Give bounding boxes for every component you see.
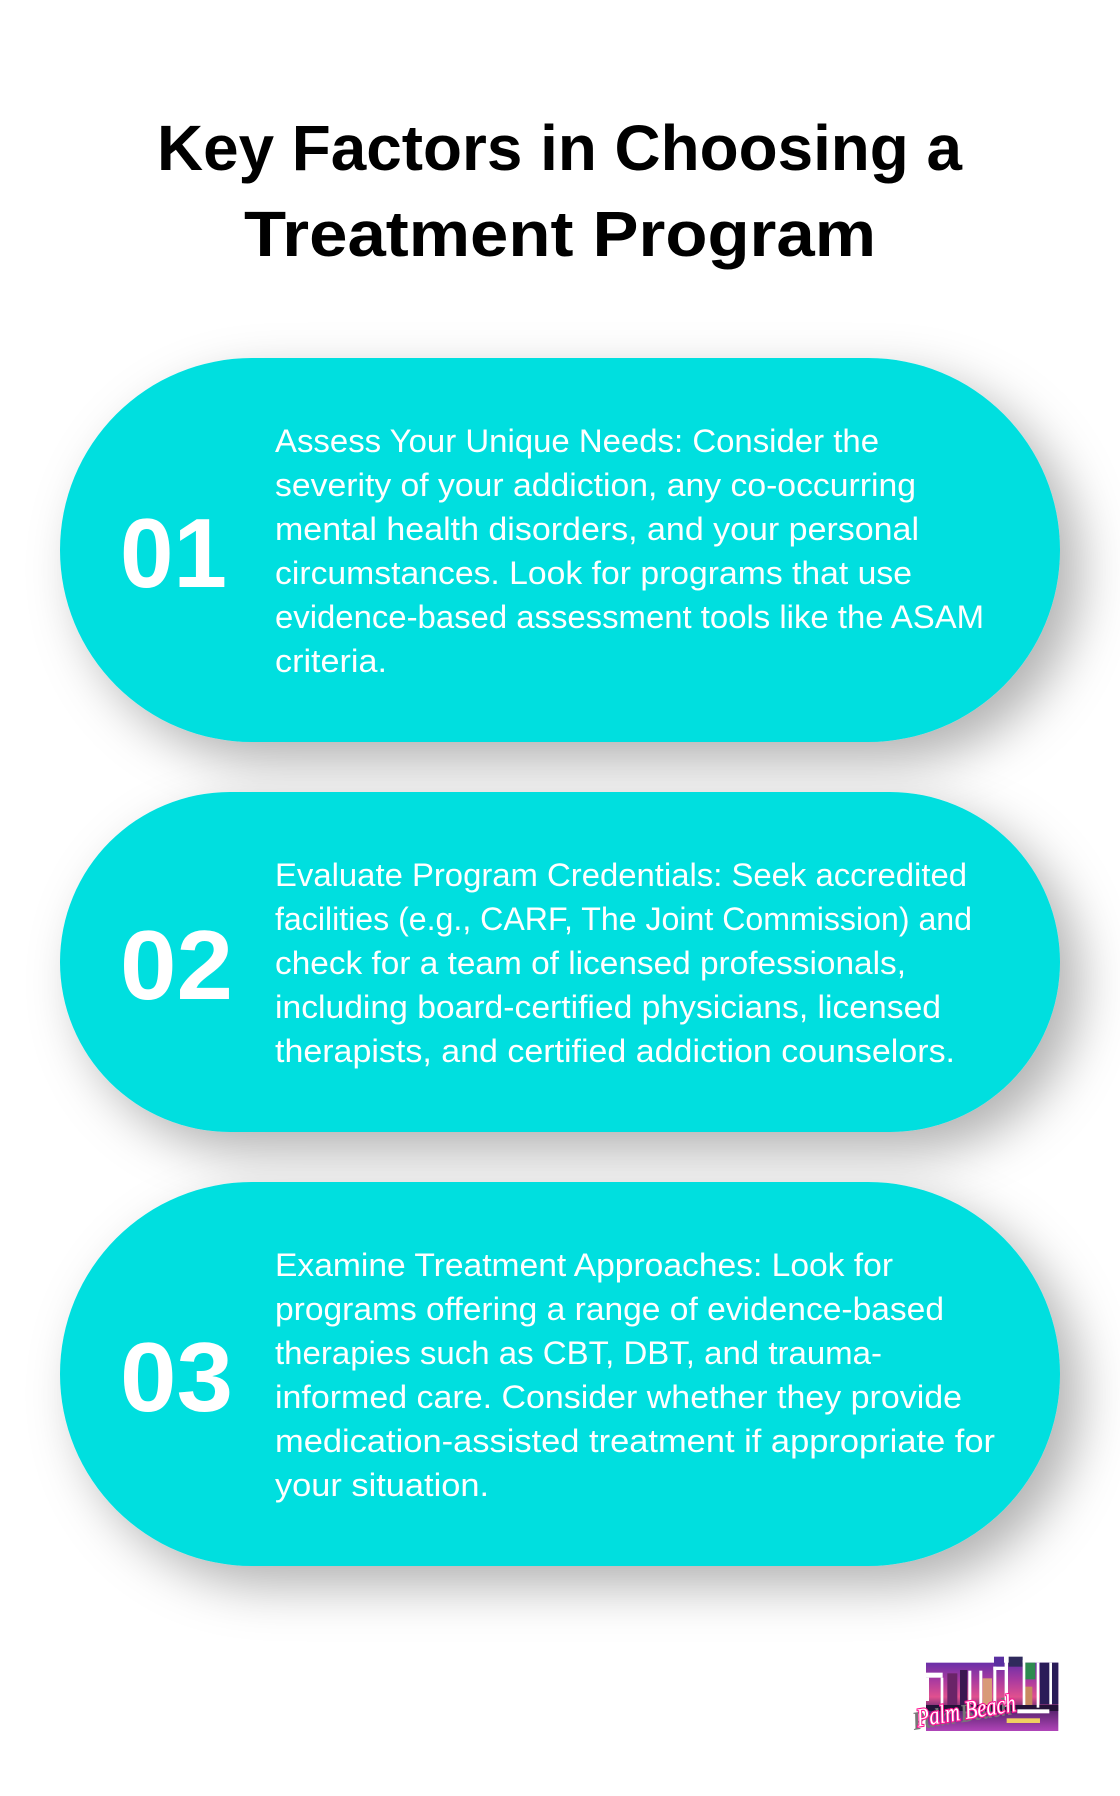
pill background 3: [60, 1182, 1060, 1566]
panel: evaluate program credentials: [60, 792, 1060, 1132]
text block 2: therapists, and certified addiction counselors.: [275, 1033, 955, 1069]
text block 1: criteria.: [275, 643, 387, 679]
pill background 2: [60, 792, 1060, 1132]
title: Key Factors in Choosing a: [157, 112, 962, 184]
text block 2: Evaluate Program Credentials: Seek accredited: [275, 857, 967, 893]
text block 3: your situation.: [275, 1467, 489, 1503]
text block 1: evidence-based assessment tools like the ASAM: [275, 599, 984, 635]
text block 1: mental health disorders, and your personal: [275, 511, 919, 547]
title: [157, 112, 962, 270]
text block 3: programs offering a range of evidence-based: [275, 1291, 944, 1327]
text block 2: facilities (e.g., CARF, The Joint Commission) and: [275, 901, 972, 937]
number 02: 02: [120, 910, 233, 1020]
panel: assess your unique needs: [60, 358, 1060, 742]
text block 3: [275, 1247, 995, 1503]
text block 1: circumstances. Look for programs that use: [275, 555, 912, 591]
panel: examine treatment approaches: [60, 1182, 1060, 1566]
text block 1: [275, 423, 984, 679]
number 01: 01: [120, 498, 227, 608]
text block 2: [275, 857, 972, 1069]
text block 3: Examine Treatment Approaches: Look for: [275, 1247, 893, 1283]
text block 2: check for a team of licensed professionals,: [275, 945, 906, 981]
number 03: 03: [120, 1322, 233, 1432]
text block 3: medication-assisted treatment if appropriate for: [275, 1423, 995, 1459]
pill background 1: [60, 358, 1060, 742]
logo script shadow: Palm Beach: [910, 1692, 1014, 1736]
text block 3: therapies such as CBT, DBT, and trauma-: [275, 1335, 882, 1371]
text block 2: including board-certified physicians, licensed: [275, 989, 941, 1025]
title: Treatment Program: [244, 198, 876, 270]
logo: amity palm beach: [910, 1657, 1058, 1736]
text block 3: informed care. Consider whether they provide: [275, 1379, 962, 1415]
logo script: Palm Beach: [914, 1688, 1018, 1733]
text block 1: severity of your addiction, any co-occurring: [275, 467, 916, 503]
text block 1: Assess Your Unique Needs: Consider the: [275, 423, 879, 459]
